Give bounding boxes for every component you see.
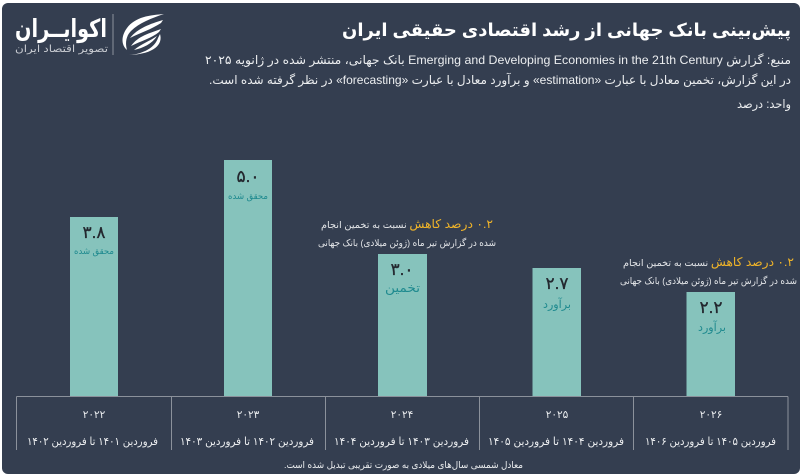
- logo wordmark: اکوایــران: [15, 15, 107, 44]
- period labels: فروردین ۱۴۰۵ تا فروردین ۱۴۰۶: [645, 436, 776, 448]
- year labels: ۲۰۲۲: [83, 409, 106, 421]
- callout: 2024 decrease: شده در گزارش تیر ماه (ژوئن میلادی) بانک جهانی: [318, 237, 496, 249]
- source line 1: منبع: گزارش Emerging and Developing Economies in the 21th Century بانک جهانی، منتشر شده در ژانویه ۲۰۲۵: [205, 53, 791, 68]
- period labels: فروردین ۱۴۰۱ تا فروردین ۱۴۰۲: [27, 436, 158, 448]
- bar 2024: [378, 254, 427, 396]
- callout: 2024 decrease: [318, 217, 496, 249]
- bar 2023: محقق شده: [228, 191, 268, 201]
- year labels: ۲۰۲۴: [391, 409, 413, 421]
- period labels: [27, 436, 776, 448]
- logo: [15, 14, 164, 55]
- period labels: فروردین ۱۴۰۳ تا فروردین ۱۴۰۴: [334, 436, 469, 448]
- year labels: ۲۰۲۶: [700, 409, 722, 421]
- callout: 2026 decrease: [620, 255, 797, 287]
- callout: 2024 decrease: ۰.۲ درصد کاهش نسبت به تخمین انجام: [321, 217, 493, 232]
- year labels: [83, 409, 722, 421]
- bar chart: [70, 160, 735, 396]
- title: پیش‌بینی بانک جهانی از رشد اقتصادی حقیقی ایران: [342, 20, 791, 41]
- bar 2024: ۳.۰: [390, 260, 414, 279]
- axis table: [16, 396, 788, 450]
- period labels: فروردین ۱۴۰۲ تا فروردین ۱۴۰۳: [180, 436, 314, 448]
- logo tagline: تصویر اقتصاد ایران: [15, 44, 108, 55]
- logo divider: [112, 14, 114, 55]
- bar 2022: [70, 217, 118, 396]
- year labels: ۲۰۲۳: [237, 409, 260, 421]
- year labels: ۲۰۲۵: [546, 409, 569, 421]
- bar 2025: [532, 268, 581, 396]
- bar 2026: ۲.۲: [700, 298, 722, 317]
- unit: واحد: درصد: [737, 97, 791, 112]
- bar 2026: [686, 292, 735, 396]
- bar 2023: ۵.۰: [236, 167, 260, 186]
- footnote: معادل شمسی سال‌های میلادی به صورت تقریبی تبدیل شده است.: [284, 460, 523, 471]
- icon: logo mark: [122, 14, 164, 55]
- bar 2024: تخمین: [385, 281, 421, 296]
- callout: 2026 decrease: ۰.۲ درصد کاهش نسبت به تخمین انجام: [623, 255, 794, 270]
- source text: [205, 53, 791, 112]
- bar 2025: ۲.۷: [546, 274, 568, 293]
- bar 2026: برآورد: [698, 320, 726, 335]
- period labels: فروردین ۱۴۰۴ تا فروردین ۱۴۰۵: [488, 436, 624, 448]
- bar 2022: محقق شده: [74, 246, 114, 256]
- source line 2: در این گزارش، تخمین معادل با عبارت «estimation» و برآورد معادل با عبارت «forecasting» در نظر گرفته شده است.: [209, 72, 791, 88]
- bar 2023: [224, 160, 272, 396]
- bar 2022: ۳.۸: [82, 223, 106, 242]
- bar 2025: برآورد: [543, 297, 571, 312]
